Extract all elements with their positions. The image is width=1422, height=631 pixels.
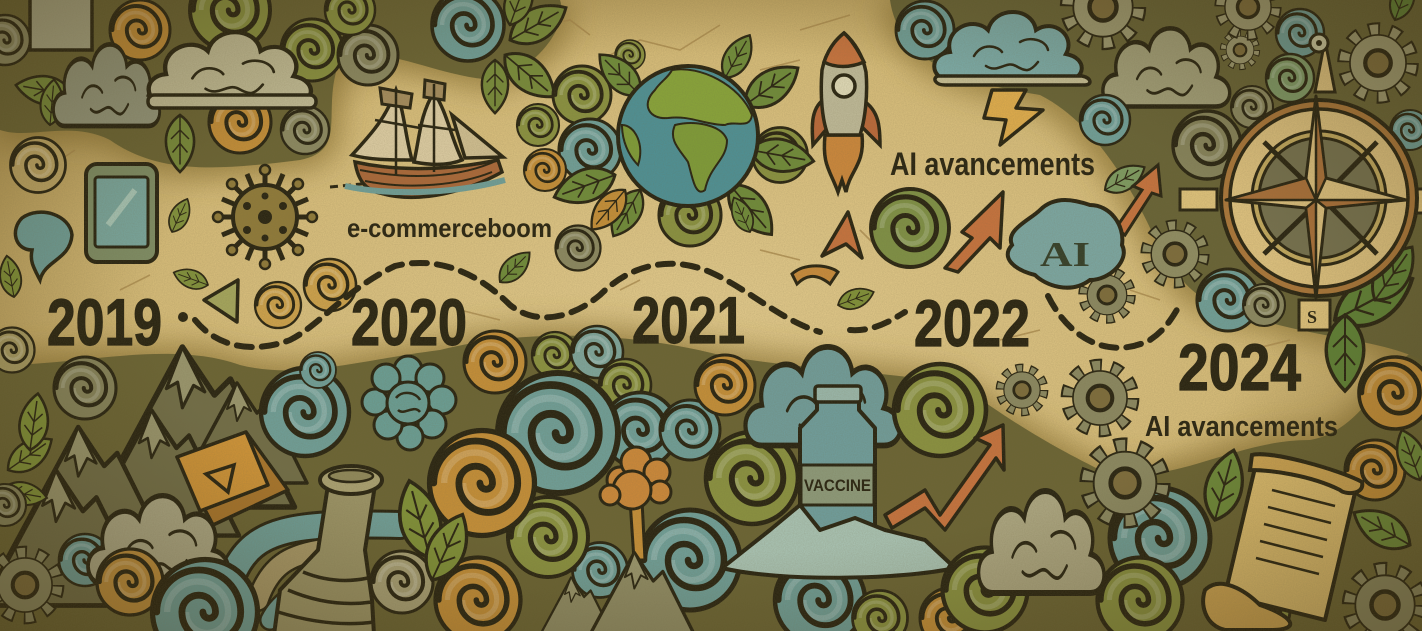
vaccine label: VACCINE <box>804 476 871 495</box>
bottom centre swirls <box>371 326 980 631</box>
teal curl <box>300 352 336 388</box>
label AI advancements top: AI avancements <box>890 146 1095 182</box>
stone bottle <box>274 466 382 631</box>
timeline dashed path <box>178 263 1178 348</box>
leaves around globe <box>493 29 816 289</box>
small swirl left <box>10 138 65 192</box>
small orange arrow <box>1116 165 1161 235</box>
rising orange arrow near 2022 <box>945 192 1003 272</box>
leaves under compass <box>1325 0 1422 391</box>
small leaves near phone <box>164 195 211 293</box>
gray cloud top-left <box>53 44 160 126</box>
year 2024: 2024 <box>1178 330 1301 404</box>
vaccine cloud <box>745 347 900 446</box>
virus icon <box>213 165 317 269</box>
top-right teal cloud <box>896 1 1090 85</box>
teal wave swirl <box>261 368 349 456</box>
vaccine bottle <box>800 386 875 540</box>
bottom-left teal and cloud group <box>0 496 258 631</box>
small mountains <box>536 552 701 631</box>
rocket <box>812 33 880 192</box>
bottom right swirls <box>942 357 1422 631</box>
left speech swirl <box>15 212 72 280</box>
green triangle doodle <box>204 280 238 322</box>
left leaf <box>0 254 24 299</box>
orange doodles near 2022 <box>792 212 877 314</box>
water mound <box>722 505 955 578</box>
green swirl near 2022 <box>871 189 949 267</box>
year 2022: 2022 <box>914 286 1030 360</box>
label AI advancements bottom: AI avancements <box>1145 411 1338 443</box>
phone icon <box>86 164 157 262</box>
gears near 2024 <box>1001 367 1419 631</box>
swirls near 2019 <box>255 259 356 328</box>
orange tree <box>600 447 671 560</box>
AI cloud <box>1008 200 1130 318</box>
leaves bottom right <box>1198 426 1422 559</box>
small swirl at left edge <box>0 484 26 526</box>
compass <box>1180 34 1422 330</box>
ship <box>330 80 505 197</box>
year 2021: 2021 <box>632 283 745 357</box>
green swirl right of bottle <box>894 364 986 456</box>
teal flower <box>362 356 456 450</box>
rising orange arrow <box>885 425 1004 530</box>
top-right doodle mass <box>890 0 1422 360</box>
lightning bolt <box>984 90 1043 145</box>
bottom right gray cloud <box>979 491 1104 593</box>
top-left doodle mass <box>0 0 562 167</box>
beige cloud top-left <box>148 32 316 108</box>
bottom-left mountains <box>0 347 307 606</box>
top-left leaves <box>13 0 574 172</box>
top right gears <box>1069 0 1410 95</box>
year 2019: 2019 <box>47 285 162 359</box>
parchment cracks <box>30 15 1290 400</box>
scroll <box>1203 454 1362 630</box>
envelope icon <box>177 432 288 525</box>
bottom doodle mass <box>0 336 1422 631</box>
green leaf by small arrow <box>1099 157 1150 200</box>
small gear by compass <box>1148 227 1202 281</box>
swirls around globe <box>517 40 808 270</box>
AI label: AI <box>1040 235 1090 274</box>
globe <box>618 66 758 206</box>
bottom-left gray swirls <box>0 328 116 419</box>
centre leaves <box>390 476 479 588</box>
globe with leaves <box>493 29 816 289</box>
bottom-left leaves <box>0 392 59 509</box>
label e-commerce boom: e-commerceboom <box>347 213 552 243</box>
compass: S <box>1307 307 1317 327</box>
swirls beside compass <box>1080 9 1422 331</box>
large gray cloud <box>1103 28 1230 106</box>
year 2020: 2020 <box>351 285 467 359</box>
teal and tan wave bands <box>235 524 400 620</box>
top-left swirls and papers <box>0 0 504 154</box>
